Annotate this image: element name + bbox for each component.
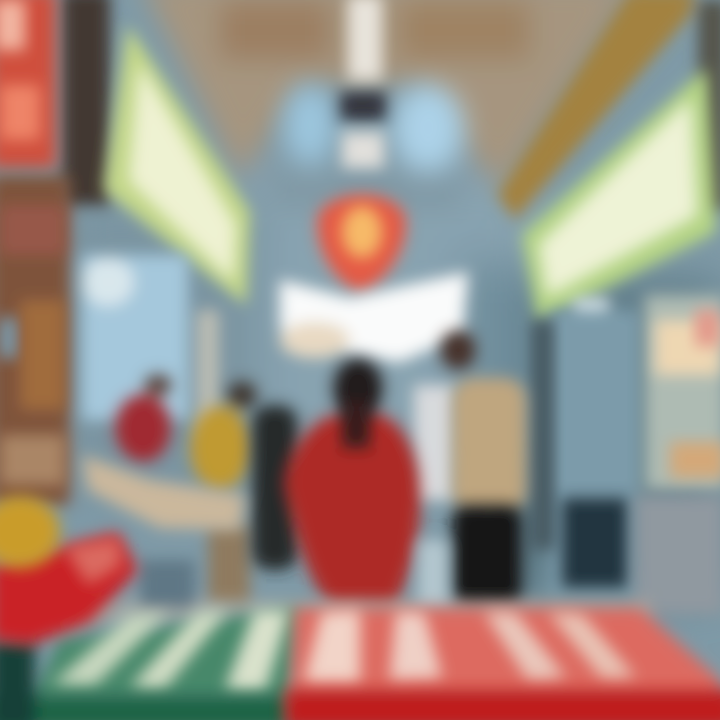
person in red at back [115,374,172,462]
right display case [635,295,720,615]
counter table [82,455,245,530]
left window [82,255,219,435]
left shelves [0,175,70,505]
person in yellow [190,381,257,605]
green and white striped mat [0,608,300,720]
main person in red [285,358,420,604]
person in tan shirt [414,330,526,605]
red and white striped mat [285,608,720,720]
ceiling lamp and blue lights [284,0,464,172]
top left red sign and dark column [0,0,110,205]
back wall [60,170,720,600]
right blue column [532,310,640,600]
white clouds [280,272,609,362]
floor base [50,540,650,624]
red table and yellow produce [0,496,138,645]
right banner [522,68,716,322]
person in dark clothes [252,405,298,570]
ceiling [140,0,640,210]
top right golden beam [497,0,720,220]
heart emblem [317,194,406,292]
left banner [104,25,250,305]
